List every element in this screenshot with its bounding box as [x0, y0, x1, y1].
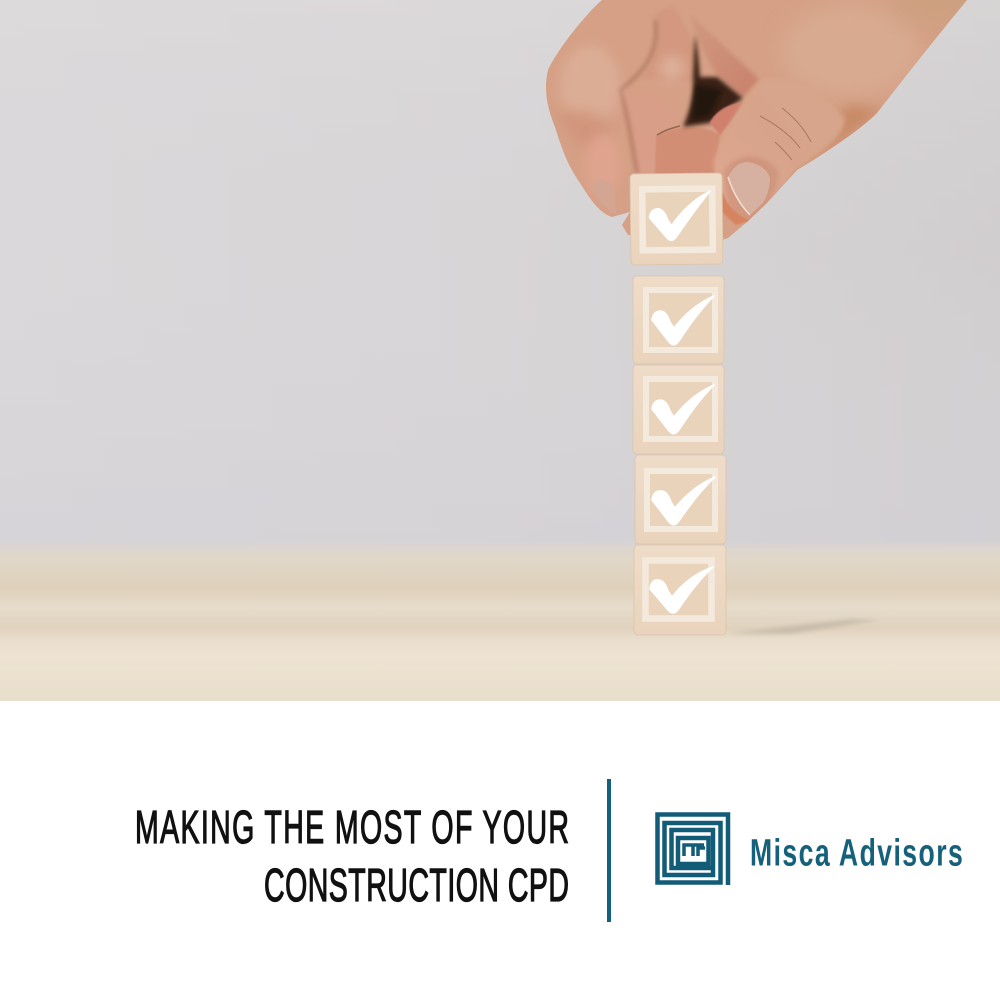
hand: small crease on curled finger [657, 126, 680, 135]
hand: curled little finger [655, 128, 720, 178]
block 4 with check mark [635, 455, 726, 544]
hand: base skin [540, 0, 970, 245]
index finger: highlight [560, 45, 620, 125]
block 5 with check mark [634, 545, 726, 635]
hand: fingertip shading near gap [710, 102, 743, 135]
title: MAKING THE MOST OF YOUR [135, 802, 569, 854]
hand: crease between index finger and middle fingers [620, 20, 656, 173]
white footer band [0, 701, 1000, 1000]
photo background: wall [0, 0, 1000, 550]
divider [607, 779, 611, 922]
hand: middle finger [640, 5, 696, 82]
photo background: wooden table [0, 540, 1000, 701]
index finger: tip [588, 138, 616, 183]
thumb: creases [760, 108, 811, 160]
block 2 with check mark [633, 276, 724, 364]
thumb: nail [728, 162, 770, 215]
title [135, 802, 569, 912]
block 3 with check mark [633, 365, 724, 454]
title: CONSTRUCTION CPD [264, 860, 569, 912]
hand: orange shade along lower edge [791, 102, 880, 176]
index finger: redness at knuckle [565, 108, 604, 142]
hand: dark gap between fingers [683, 35, 743, 127]
hand: curled ring finger [618, 88, 680, 175]
hand: tan wrist tone [932, 0, 967, 20]
hand: palm fold near the thumb [696, 25, 759, 96]
logo wordmark: Misca Advisors [750, 831, 963, 874]
hand holding block [540, 0, 995, 245]
block 1 with check mark (held) [630, 173, 723, 265]
index finger: nail [594, 179, 616, 214]
thumb [712, 83, 846, 196]
thumb: orange flesh beside nail [722, 192, 750, 226]
logo icon: square spiral [658, 814, 728, 885]
thumb: shaded tip around the nail [724, 156, 778, 222]
hand: highlight on the back of the hand [789, 12, 911, 88]
